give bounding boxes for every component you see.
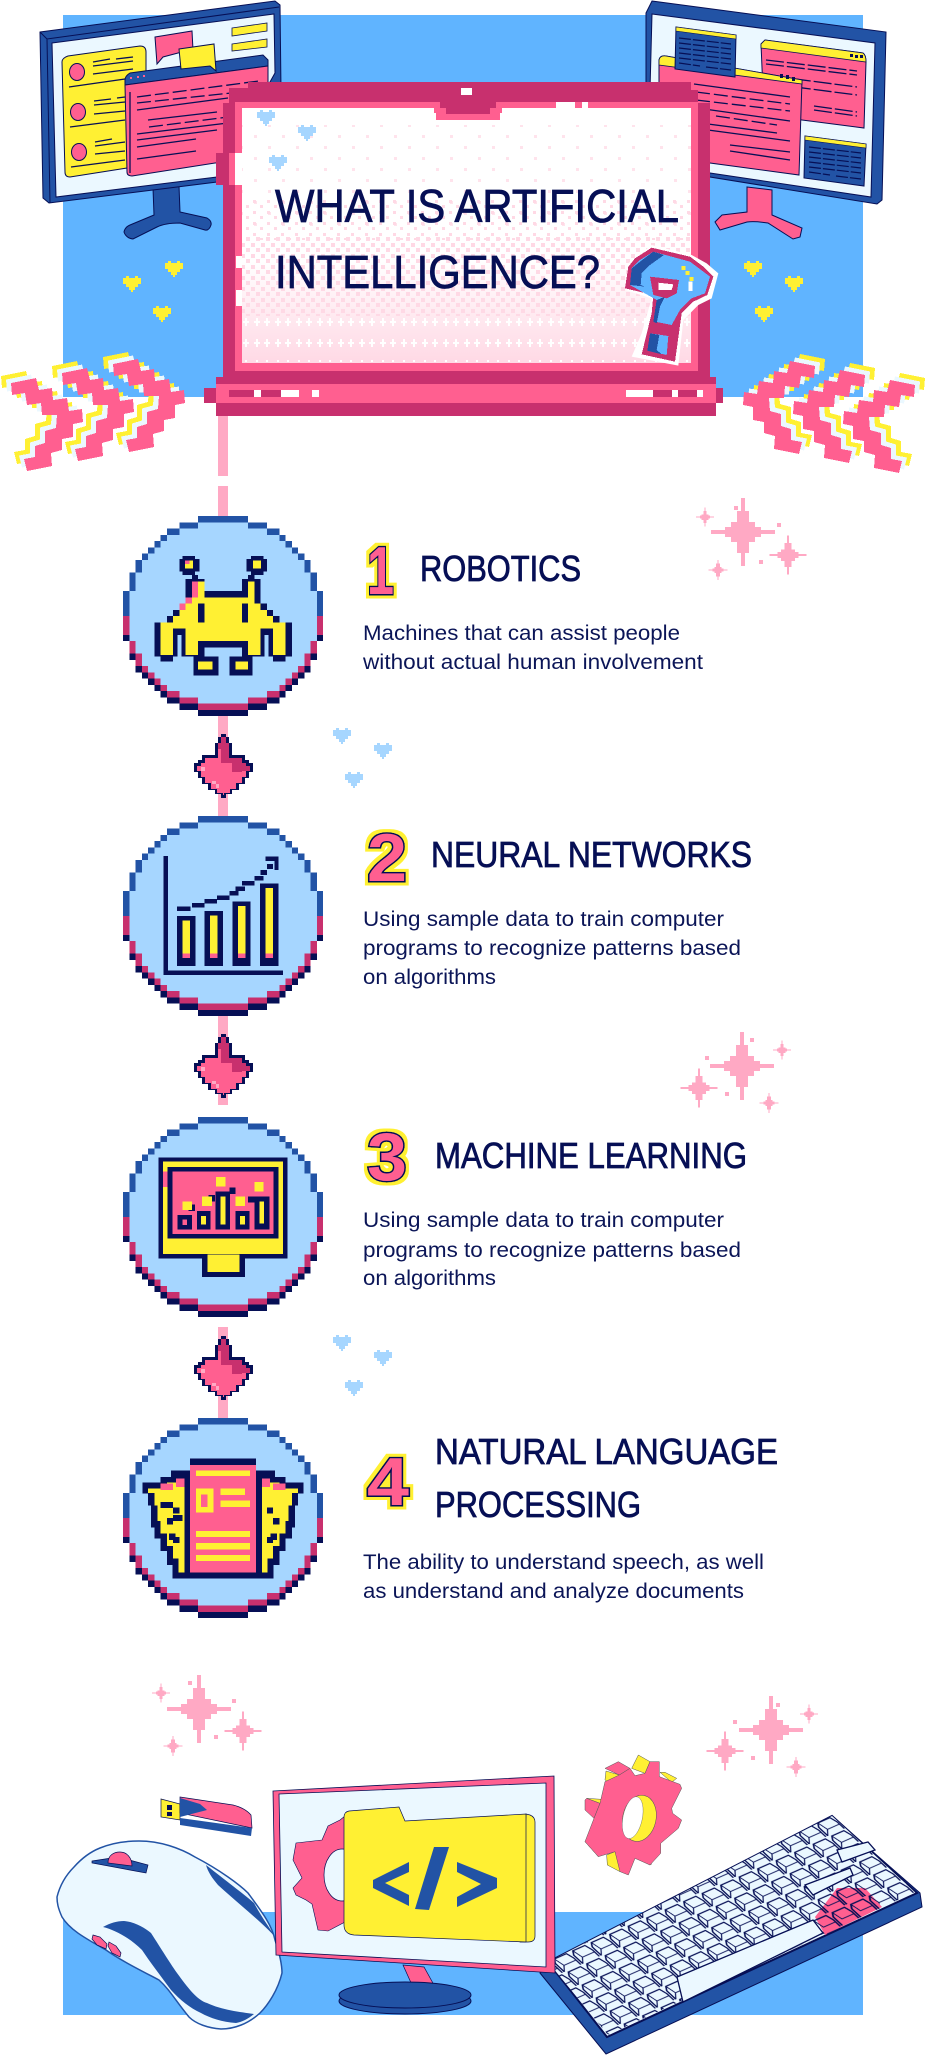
folder (344, 1807, 526, 1942)
pink window with yellow bar (761, 40, 866, 128)
notch inner (440, 102, 496, 114)
pink speech bubble (155, 31, 193, 64)
heading: ROBOTICS (420, 548, 581, 589)
gear hole behind folder (324, 1849, 360, 1901)
illustration: computer mouse (57, 1841, 282, 2029)
step 2: neural networks (123, 816, 752, 1016)
base highlight band (216, 384, 716, 403)
connector: line between circles (218, 716, 228, 1418)
yellow bars (232, 23, 267, 51)
decorations: pink sparkles bottom left (152, 1675, 261, 1756)
monitor screen (279, 1783, 546, 1967)
keyboard base (540, 1816, 922, 2054)
stand base (339, 1982, 471, 2014)
panel: retro laptop title card (204, 82, 723, 416)
camera (461, 88, 472, 95)
monitor frame (40, 1, 281, 203)
decorations: pink sparkles bottom right (707, 1696, 818, 1777)
icon: pink diamond 1 (194, 734, 253, 798)
illustration: mechanical keyboard (540, 1816, 922, 2054)
description: programs to recognize patterns based (363, 937, 741, 960)
icon: documents badge (123, 1418, 323, 1618)
base indicators (229, 390, 703, 397)
dark window bottom (804, 136, 866, 186)
space bar (677, 1920, 823, 2002)
description (363, 908, 741, 989)
description: Using sample data to train computer (363, 908, 724, 931)
decorations: yellow hearts left (123, 261, 183, 322)
decorations: pink sparkles top (696, 498, 806, 580)
gear hole opening (619, 1795, 647, 1841)
laptop base (204, 377, 723, 416)
title (275, 180, 679, 298)
gear yellow sides (585, 1755, 677, 1872)
decorations: blue hearts 2 (333, 1335, 392, 1396)
monitor stand (715, 187, 802, 239)
mouse scroll base (92, 1857, 148, 1873)
illustration: right monitor (646, 1, 886, 239)
description: as understand and analyze documents (363, 1580, 744, 1603)
number 3: 3 (367, 1119, 407, 1195)
screen notch (434, 102, 502, 120)
monitor bevel (40, 7, 279, 203)
description: Machines that can assist people (363, 622, 680, 645)
laptop frame (216, 82, 710, 378)
number 1: 1 (367, 533, 394, 609)
central pink window (659, 56, 802, 175)
decoration: right zigzags (743, 354, 925, 473)
yellow list panel (62, 46, 146, 177)
icon: pink diamond 2 (194, 1034, 253, 1098)
description (363, 1209, 741, 1290)
description (362, 622, 703, 674)
heading: PROCESSING (435, 1484, 641, 1525)
gear face (585, 1762, 682, 1875)
folder back (520, 1814, 535, 1942)
description: The ability to understand speech, as well (363, 1551, 764, 1574)
illustration: USB drive (161, 1797, 252, 1836)
description: programs to recognize patterns based (363, 1239, 741, 1262)
blue window header (125, 55, 268, 85)
heading (435, 1431, 778, 1525)
pink window (125, 66, 268, 176)
code symbol on folder (373, 1847, 497, 1910)
list avatars and lines (69, 57, 133, 167)
pink keys (815, 1888, 882, 1935)
heading: NATURAL LANGUAGE (435, 1431, 778, 1472)
monitor screen (52, 14, 275, 197)
step 1: robotics (123, 516, 703, 716)
background: footer blue panel (63, 1912, 863, 2015)
stand neck (403, 1965, 434, 1985)
decorations: yellow hearts right (744, 261, 803, 322)
connector: dashed line under header (218, 415, 228, 516)
illustration: pink gear (585, 1755, 682, 1875)
gear hole (618, 1792, 660, 1845)
number 2: 2 (367, 820, 407, 896)
illustration: left monitor (40, 1, 281, 239)
heading: MACHINE LEARNING (435, 1135, 747, 1176)
usb connector (161, 1799, 180, 1820)
mouse body (57, 1841, 282, 2029)
step 3: machine learning (123, 1117, 747, 1317)
usb lower band (180, 1818, 252, 1836)
decoration: left zigzags (1, 352, 185, 471)
keyboard plate (548, 1816, 917, 2037)
background: header blue panel (63, 15, 863, 397)
keys (548, 1816, 915, 2035)
icon: question mark (625, 245, 718, 366)
monitor frame (646, 1, 886, 204)
usb contacts (167, 1805, 172, 1816)
icon: bar chart badge (123, 816, 323, 1016)
description: Using sample data to train computer (363, 1209, 724, 1232)
laptop screen (229, 108, 691, 363)
blue hearts on screen (257, 110, 316, 171)
gear behind folder (293, 1812, 350, 1931)
mouse wheel (108, 1852, 132, 1866)
gear pink sides (585, 1762, 630, 1818)
number 4: 4 (367, 1444, 409, 1520)
icon: pink diamond 3 (194, 1336, 253, 1400)
mouse side stripe (206, 1865, 275, 1937)
decorations: blue hearts 1 (333, 728, 392, 788)
title: INTELLIGENCE? (275, 246, 600, 298)
illustration: desktop monitor (273, 1776, 555, 2014)
monitor screen (650, 14, 875, 197)
frame highlights (556, 102, 588, 108)
description: on algorithms (363, 1267, 496, 1290)
dark window top (675, 27, 736, 77)
description: without actual human involvement (362, 651, 703, 674)
monitor stand (124, 186, 211, 239)
title: WHAT IS ARTIFICIAL (275, 180, 679, 232)
heading: NEURAL NETWORKS (431, 834, 752, 875)
step 4: natural language processing (123, 1418, 778, 1618)
mouse blue stripe (103, 1921, 254, 2023)
mouse buttons (92, 1935, 121, 1957)
description (363, 1551, 764, 1603)
usb cap accent (180, 1798, 207, 1817)
yellow speech bubble (179, 44, 216, 71)
icon: robot badge (123, 516, 323, 716)
enter and shift keys (805, 1842, 875, 1895)
description: on algorithms (363, 966, 496, 989)
decorations: pink sparkles middle (681, 1032, 791, 1113)
icon: monitor chart badge (123, 1117, 323, 1317)
usb body (180, 1797, 252, 1828)
monitor frame (273, 1776, 555, 1973)
laptop inner border (235, 102, 698, 371)
